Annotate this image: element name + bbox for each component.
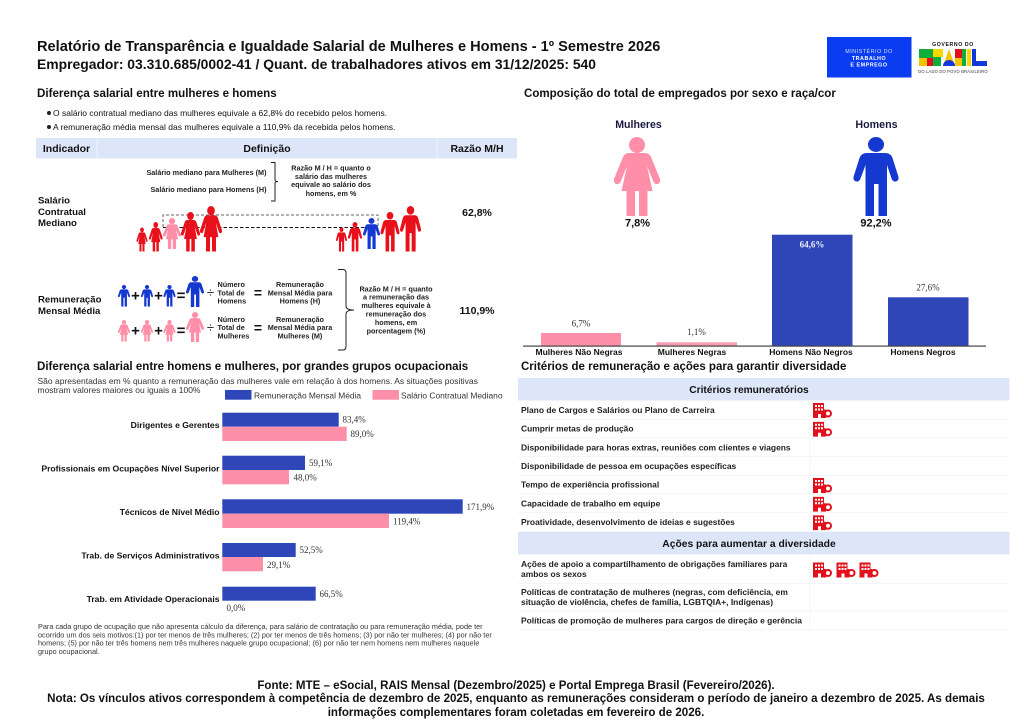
- brace and ratio definition: homens, em: [375, 318, 417, 327]
- logo: Ministério do Trabalho e Emprego: MINISTÉRIO DO: [845, 48, 893, 55]
- formula: men: Total de: [218, 288, 245, 297]
- group: Serviços Administrativos: [81, 543, 323, 571]
- group: Técnicos: [120, 499, 495, 528]
- rows: criteria labels: Disponibilidade de pessoa em ocupações específicas: [521, 461, 737, 471]
- group: Técnicos: Técnicos de Nível Médio: [120, 507, 220, 517]
- formula: men: Mensal Média para: [268, 288, 333, 297]
- icon: women share: [614, 119, 662, 230]
- group: Dirigentes e Gerentes: Dirigentes e Gerentes: [131, 420, 220, 430]
- logo: Ministério do Trabalho e Emprego: E EMPREGO: [850, 62, 888, 68]
- icons: company markers for criteria: [813, 403, 831, 530]
- formula: women: Mulheres: [218, 332, 249, 340]
- formula: men: Homens: [218, 297, 246, 306]
- text block: footnote: ocorrido um dos seis motivos:(1) por ter menos de três mulheres; (2) por ter menos de três homens; (3) por não ter mulheres; (4) por não ter: [38, 630, 492, 639]
- group: Profissionais: [41, 456, 333, 484]
- group: Técnicos: 119,4%: [393, 516, 421, 526]
- value: 62,8%: 62,8%: [462, 207, 493, 219]
- text block: chart description: mostram valores maiores ou iguais a 100%: [38, 385, 201, 395]
- legend: [225, 390, 503, 400]
- title: [37, 39, 660, 72]
- formula: men: Homens (H): [280, 297, 321, 306]
- group: Serviços Administrativos: 52,5%: [300, 545, 323, 555]
- brace and ratio definition: mulheres equivale à: [361, 301, 432, 310]
- brace and ratio definition: Razão M / H = quanto: [359, 284, 433, 293]
- table header: [36, 138, 517, 158]
- group: Técnicos: 171,9%: [466, 502, 495, 512]
- footer: source and note: [47, 680, 985, 719]
- dashed median connector: [163, 215, 378, 228]
- logo: Ministério do Trabalho e Emprego: [827, 37, 912, 78]
- bar chart: occupational groups: [41, 413, 495, 613]
- rows: criteria labels: Proatividade, desenvolvimento de ideias e sugestões: [521, 517, 735, 527]
- definition: salário mediano texts: [146, 162, 371, 201]
- icon: women share: 7,8%: [625, 218, 650, 230]
- table header: Definição: [243, 143, 291, 155]
- header: critérios remuneratórios: Critérios remuneratórios: [689, 385, 809, 396]
- title: Relatório de Transparência e Igualdade Salarial de Mulheres e Homens - 1º Semestre 2026: [37, 39, 660, 55]
- group: Dirigentes e Gerentes: 89,0%: [350, 429, 374, 439]
- rows: criteria labels: Capacidade de trabalho em equipe: [521, 498, 661, 508]
- text block: bullets: O salário contratual mediano das mulheres equivale a 62,8% do recebido pelos homens.: [53, 108, 387, 118]
- rows: criteria labels: Disponibilidade para horas extras, reuniões com clientes e viagens: [521, 442, 791, 452]
- bar chart: composition: Homens Negros: [890, 347, 956, 357]
- logo: Governo do Brasil: GOVERNO DO: [932, 42, 974, 48]
- text block: footnote: Para cada grupo de ocupação que não apresenta cálculo da diferença, para salário de contratação ou para remuneração média, pode ter: [38, 622, 483, 631]
- table header: Razão M/H: [450, 143, 504, 155]
- icon: men share: [853, 119, 899, 230]
- bar chart: composition: 6,7%: [572, 318, 591, 328]
- formula: women: =: [177, 322, 186, 340]
- formula: men: +: [131, 288, 140, 304]
- formula: women: Mensal Média para: [268, 323, 333, 332]
- definition: salário mediano texts: homens, em %: [306, 189, 357, 198]
- group: Atividade Operacionais: 0,0%: [226, 603, 246, 613]
- bar chart: composition: Mulheres Negras: [658, 347, 727, 357]
- heading: composição: Composição do total de empregados por sexo e raça/cor: [524, 88, 836, 100]
- logo: Governo do Brasil: DO LADO DO POVO BRASILEIRO: [918, 69, 988, 74]
- header: critérios remuneratórios: [518, 378, 1010, 400]
- formula: men: =: [177, 288, 186, 304]
- value: 110,9%: 110,9%: [459, 305, 495, 317]
- row label: salário contratual mediano: Mediano: [38, 218, 77, 229]
- text block: footnote: grupo ocupacional.: [38, 647, 100, 656]
- panel: indicator table: [36, 138, 517, 350]
- definition: salário mediano texts: equivale ao salário dos: [291, 180, 371, 189]
- rows: criteria labels: Tempo de experiência profissional: [521, 480, 659, 490]
- rows: criteria labels: Cumprir metas de produção: [521, 424, 634, 434]
- formula: women: Total de: [218, 323, 245, 332]
- definition: salário mediano texts: Razão M / H = quanto o: [291, 164, 371, 172]
- footer: source and note: informações complementares foram coletadas em fevereiro de 2026.: [328, 707, 704, 719]
- legend: Remuneração Mensal Média: [254, 390, 361, 400]
- formula: men: Remuneração: [276, 280, 325, 289]
- brace and ratio definition: remuneração dos: [366, 310, 426, 319]
- brace and ratio definition: a remuneração das: [363, 293, 429, 302]
- icon: women share: Mulheres: [615, 119, 662, 131]
- formula: women: Mulheres (M): [278, 332, 323, 340]
- row label: remuneração mensal média: Remuneração: [38, 294, 102, 306]
- group: Atividade Operacionais: 66,5%: [320, 589, 343, 599]
- bar chart: composition: 27,6%: [916, 282, 940, 292]
- group: Dirigentes e Gerentes: [131, 413, 374, 441]
- bar chart: composition: Homens Não Negros: [769, 347, 853, 357]
- rows: criteria labels: [521, 405, 791, 527]
- group: Profissionais: 59,1%: [309, 458, 333, 468]
- header: ações para aumentar a diversidade: Ações para aumentar a diversidade: [662, 539, 836, 550]
- bar chart: composition: 1,1%: [687, 327, 706, 337]
- definition: salário mediano texts: Salário mediano para Homens (H): [150, 185, 267, 194]
- formula: men: =: [254, 284, 262, 300]
- bar chart: composition: [523, 235, 986, 357]
- formula: women: [118, 312, 333, 342]
- footer: source and note: Fonte: MTE – eSocial, RAIS Mensal (Dezembro/2025) e Portal Emprega Brasil (Fevereiro/2026).: [257, 680, 775, 692]
- formula: men: [118, 276, 333, 307]
- header: ações para aumentar a diversidade: [518, 532, 1010, 554]
- bar chart: composition: Mulheres Não Negras: [536, 347, 623, 357]
- heading: critérios: Critérios de remuneração e ações para garantir diversidade: [521, 361, 846, 373]
- rows: actions labels: Políticas de promoção de mulheres para cargos de direção e gerência: [521, 616, 802, 626]
- text block: chart description: São apresentadas em % quanto a remuneração das mulheres vale em relação à dos homens. As situações positivas: [38, 376, 478, 386]
- formula: women: Remuneração: [276, 315, 325, 324]
- formula: men: +: [154, 288, 163, 304]
- rows: actions labels: ambos os sexos: [521, 569, 587, 579]
- group: Atividade Operacionais: Trab. em Atividade Operacionais: [87, 594, 220, 604]
- icons: company markers for actions: [813, 562, 878, 578]
- group: Serviços Administrativos: Trab. de Serviços Administrativos: [81, 550, 220, 560]
- definition: salário mediano texts: salário das mulheres: [295, 172, 367, 181]
- formula: men: ÷: [207, 285, 214, 300]
- panel: criteria table: [518, 378, 1010, 630]
- formula: women: ÷: [207, 320, 214, 335]
- formula: men: Número: [218, 280, 245, 289]
- rows: actions labels: Políticas de contratação de mulheres (negras, com deficiência, em: [521, 587, 788, 597]
- logo: Governo do Brasil: [918, 42, 988, 74]
- legend: Salário Contratual Mediano: [401, 390, 503, 400]
- rows: criteria labels: Plano de Cargos e Salários ou Plano de Carreira: [521, 405, 715, 415]
- text block: bullets: A remuneração média mensal das mulheres equivale a 110,9% da recebida pelos homens.: [53, 122, 395, 132]
- row label: salário contratual mediano: Contratual: [38, 207, 86, 218]
- icon: men share: 92,2%: [860, 218, 892, 230]
- title: Empregador: 03.310.685/0002-41 / Quant. de trabalhadores ativos em 31/12/2025: 540: [37, 56, 596, 72]
- rows: actions labels: [521, 559, 802, 626]
- row separators: [518, 400, 1009, 630]
- group: Profissionais: Profissionais em Ocupações Nível Superior: [41, 464, 220, 474]
- formula: women: +: [154, 322, 163, 340]
- row label: remuneração mensal média: Mensal Média: [38, 306, 101, 317]
- formula: women: Número: [218, 315, 245, 324]
- icons: women ordered by salary: [136, 206, 222, 252]
- group: Profissionais: 48,0%: [294, 472, 317, 482]
- rows: actions labels: situação de violência, chefes de família, LGBTQIA+, Indígenas): [521, 597, 773, 607]
- definition: salário mediano texts: Salário mediano para Mulheres (M): [146, 168, 267, 177]
- row label: salário contratual mediano: Salário: [38, 196, 70, 206]
- text block: bullets: [47, 108, 395, 132]
- heading: diferença por grupos ocupacionais: Diferença salarial entre homens e mulheres, por grandes grupos ocupacionais: [37, 361, 468, 373]
- icon: men share: Homens: [855, 119, 898, 131]
- group: Serviços Administrativos: 29,1%: [267, 560, 291, 570]
- footer: source and note: Nota: Os vínculos ativos correspondem à competência de dezembro de 2025, enquanto as remunerações consideram o período de janeiro a dezembro de 2025. As demais: [47, 693, 985, 705]
- icons: men ordered by salary: [336, 206, 421, 252]
- bar chart: composition: 64,6%: [800, 240, 824, 250]
- heading: diferença salarial: Diferença salarial entre mulheres e homens: [37, 87, 277, 100]
- rows: actions labels: Ações de apoio a compartilhamento de obrigações familiares para: [521, 559, 788, 569]
- brace and ratio definition: [338, 270, 433, 350]
- group: Atividade Operacionais: [87, 587, 343, 613]
- table header: Indicador: [43, 143, 90, 155]
- formula: women: =: [254, 320, 262, 336]
- formula: women: +: [131, 322, 140, 340]
- logo: Ministério do Trabalho e Emprego: TRABALHO: [852, 56, 886, 62]
- brace and ratio definition: porcentagem (%): [367, 327, 426, 336]
- text block: footnote: homens; (5) por não ter três homens nem três mulheres naquele grupo ocupacional; (6) por não ter nem homens nem mulheres naquele: [38, 639, 479, 648]
- group: Dirigentes e Gerentes: 83,4%: [342, 414, 366, 424]
